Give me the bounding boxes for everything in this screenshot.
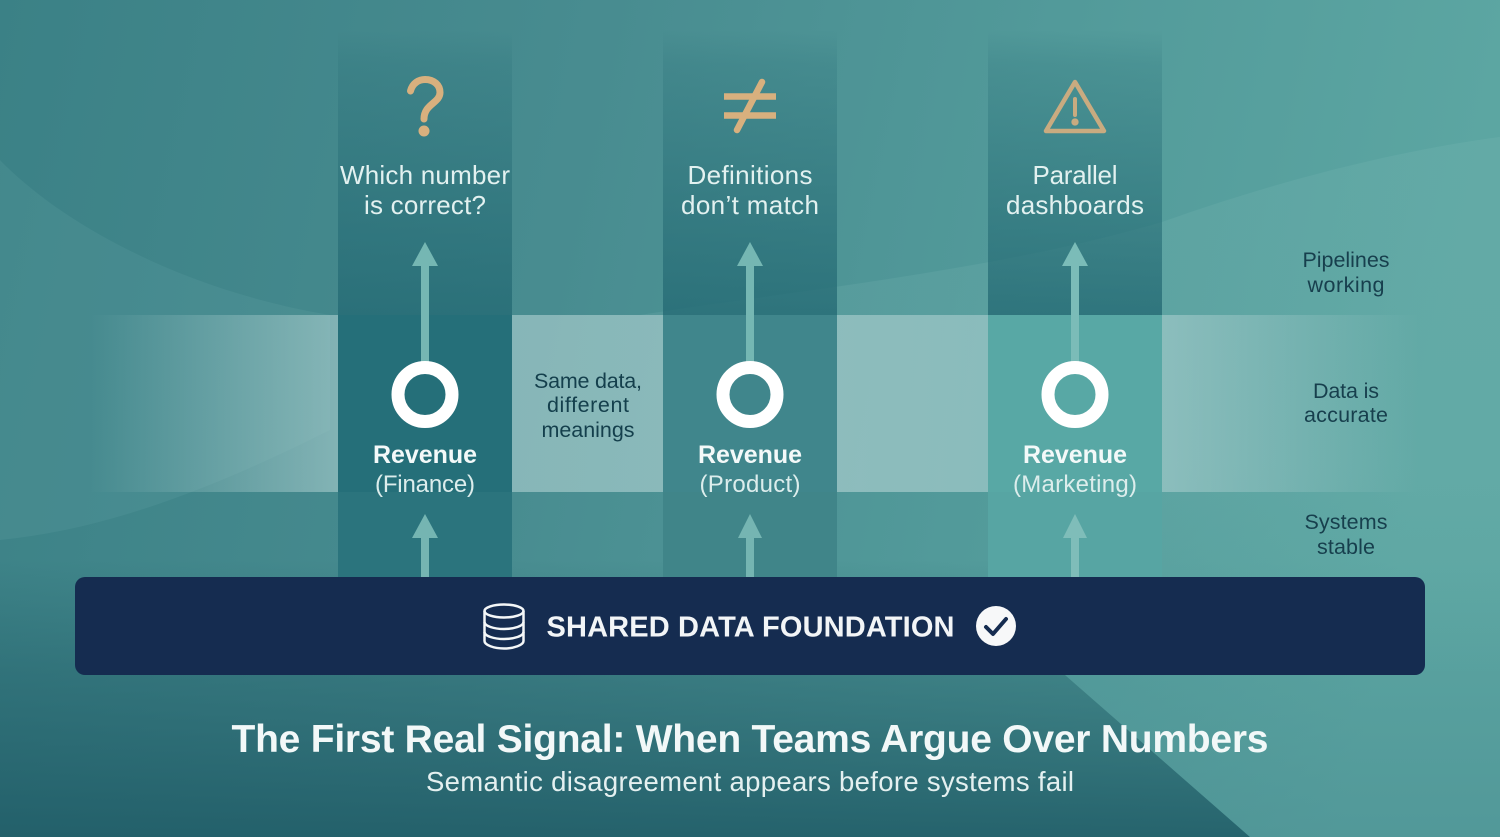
annotation: data is accurate: [1304, 379, 1388, 427]
title: The First Real Signal: When Teams Argue Over Numbers: [232, 718, 1268, 761]
label: parallel dashboards: [1006, 160, 1144, 220]
foundation bar: [75, 577, 1425, 675]
horizontal band: data layer: [90, 315, 1420, 492]
icon: database: [484, 604, 524, 648]
annotation: systems stable: Systems: [1304, 510, 1388, 534]
annotation: same data, different meanings: Same data,: [534, 369, 642, 393]
annotation: systems stable: stable: [1317, 535, 1375, 559]
column: Marketing: [988, 30, 1162, 577]
annotation: pipelines working: Pipelines: [1302, 248, 1390, 272]
label: Revenue Product: [698, 441, 802, 498]
arrow: Finance lower: [412, 514, 438, 577]
arrow: Finance upper: [412, 242, 438, 362]
label: Revenue Finance: Revenue: [373, 441, 477, 469]
annotation: same data, different meanings: meanings: [542, 418, 634, 442]
annotation: same data, different meanings: different: [547, 393, 629, 417]
label: which number is correct: is correct?: [364, 190, 486, 220]
label: Revenue Marketing: (Marketing): [1013, 471, 1137, 498]
label: Revenue Finance: [373, 441, 477, 498]
node: Marketing: [1048, 368, 1102, 422]
arrow: Product lower: [738, 514, 762, 577]
icon: warning triangle: [1046, 82, 1104, 131]
label: which number is correct: Which number: [340, 160, 510, 190]
column: Product: [663, 30, 837, 577]
arrow: Marketing upper: [1062, 242, 1088, 362]
label: Revenue Product: Revenue: [698, 441, 802, 469]
label: Revenue Marketing: [1013, 441, 1137, 498]
node: Product: [723, 368, 777, 422]
annotation: pipelines working: working: [1306, 273, 1384, 297]
label: parallel dashboards: Parallel: [1032, 160, 1118, 190]
icon: question mark: [410, 80, 440, 136]
label: which number is correct: [340, 160, 510, 220]
annotation: data is accurate: Data is: [1313, 379, 1379, 403]
annotation: data is accurate: accurate: [1304, 403, 1388, 427]
icon: check badge: [976, 606, 1016, 646]
label: Revenue Product: (Product): [700, 471, 800, 498]
label: definitions don't match: don’t match: [681, 190, 819, 220]
arrow: Product upper: [737, 242, 763, 362]
label: Revenue Finance: (Finance): [375, 471, 475, 498]
icon: not equal: [724, 82, 776, 130]
label: definitions don't match: Definitions: [688, 160, 812, 190]
column: Finance: [338, 30, 512, 577]
label: definitions don't match: [681, 160, 819, 220]
node: Finance: [398, 368, 452, 422]
label: parallel dashboards: dashboards: [1006, 190, 1144, 220]
annotation: same data, different meanings: [534, 369, 642, 442]
label: Revenue Marketing: Revenue: [1023, 441, 1127, 469]
foundation label: SHARED DATA FOUNDATION: [546, 612, 954, 644]
annotation: systems stable: [1304, 510, 1388, 559]
annotation: pipelines working: [1302, 248, 1390, 297]
arrow: Marketing lower: [1063, 514, 1087, 577]
subtitle: Semantic disagreement appears before systems fail: [426, 766, 1074, 797]
